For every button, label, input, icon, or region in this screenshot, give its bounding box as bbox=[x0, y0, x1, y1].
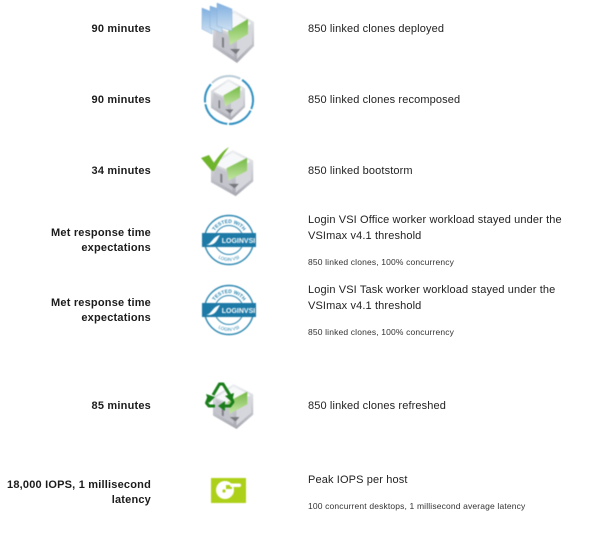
icon: Login VSI badge task: LOGIN VSI bbox=[218, 325, 240, 332]
row 4 description: VSImax v4.1 threshold bbox=[308, 230, 421, 242]
row 4 metric: Met response time bbox=[51, 227, 151, 239]
icon: refresh recycle bbox=[206, 384, 253, 429]
row 3 metric: 34 minutes bbox=[92, 165, 151, 177]
icon: Login VSI badge task: LOGINVSI bbox=[222, 308, 255, 315]
row 4 metric: expectations bbox=[81, 242, 151, 254]
row 5 metric bbox=[51, 297, 151, 324]
row 4 note: 850 linked clones, 100% concurrency bbox=[308, 257, 454, 267]
icon: recomposed clones bbox=[205, 76, 253, 124]
row 7 metric bbox=[7, 479, 151, 506]
row 5 metric: Met response time bbox=[51, 297, 151, 309]
icon: Login VSI badge office: LOGIN VSI bbox=[218, 255, 240, 262]
row 1 metric: 90 minutes bbox=[92, 23, 151, 35]
icon: Login VSI badge task bbox=[201, 284, 257, 336]
row 5 description bbox=[308, 284, 555, 312]
row 2 metric: 90 minutes bbox=[92, 94, 151, 106]
row 1 description: 850 linked clones deployed bbox=[308, 23, 444, 35]
row 5 description: VSImax v4.1 threshold bbox=[308, 300, 421, 312]
row 6 metric: 85 minutes bbox=[92, 400, 151, 412]
row 3 description: 850 linked bootstorm bbox=[308, 165, 413, 177]
row 5 metric: expectations bbox=[81, 312, 151, 324]
row 2 description: 850 linked clones recomposed bbox=[308, 94, 460, 106]
row 5 description: Login VSI Task worker workload stayed under the bbox=[308, 284, 555, 296]
icon: bootstorm check bbox=[201, 147, 253, 196]
row 4 description bbox=[308, 214, 562, 242]
row 7 metric: latency bbox=[112, 494, 151, 506]
row 4 metric bbox=[51, 227, 151, 254]
row 6 description: 850 linked clones refreshed bbox=[308, 400, 446, 412]
row 7 note: 100 concurrent desktops, 1 millisecond average latency bbox=[308, 501, 525, 511]
icon: Login VSI badge office bbox=[201, 214, 257, 266]
icon: Login VSI badge office: TESTED WITH bbox=[212, 218, 246, 232]
row 7 description: Peak IOPS per host bbox=[308, 474, 408, 486]
icon: Login VSI badge office: LOGINVSI bbox=[222, 238, 255, 245]
icon: deployed clones bbox=[202, 3, 254, 63]
row 7 metric: 18,000 IOPS, 1 millisecond bbox=[7, 479, 151, 491]
icon: Login VSI badge task: TESTED WITH bbox=[212, 288, 246, 302]
icon: IOPS logo bbox=[211, 478, 246, 503]
row 5 note: 850 linked clones, 100% concurrency bbox=[308, 327, 454, 337]
row 4 description: Login VSI Office worker workload stayed under the bbox=[308, 214, 562, 226]
